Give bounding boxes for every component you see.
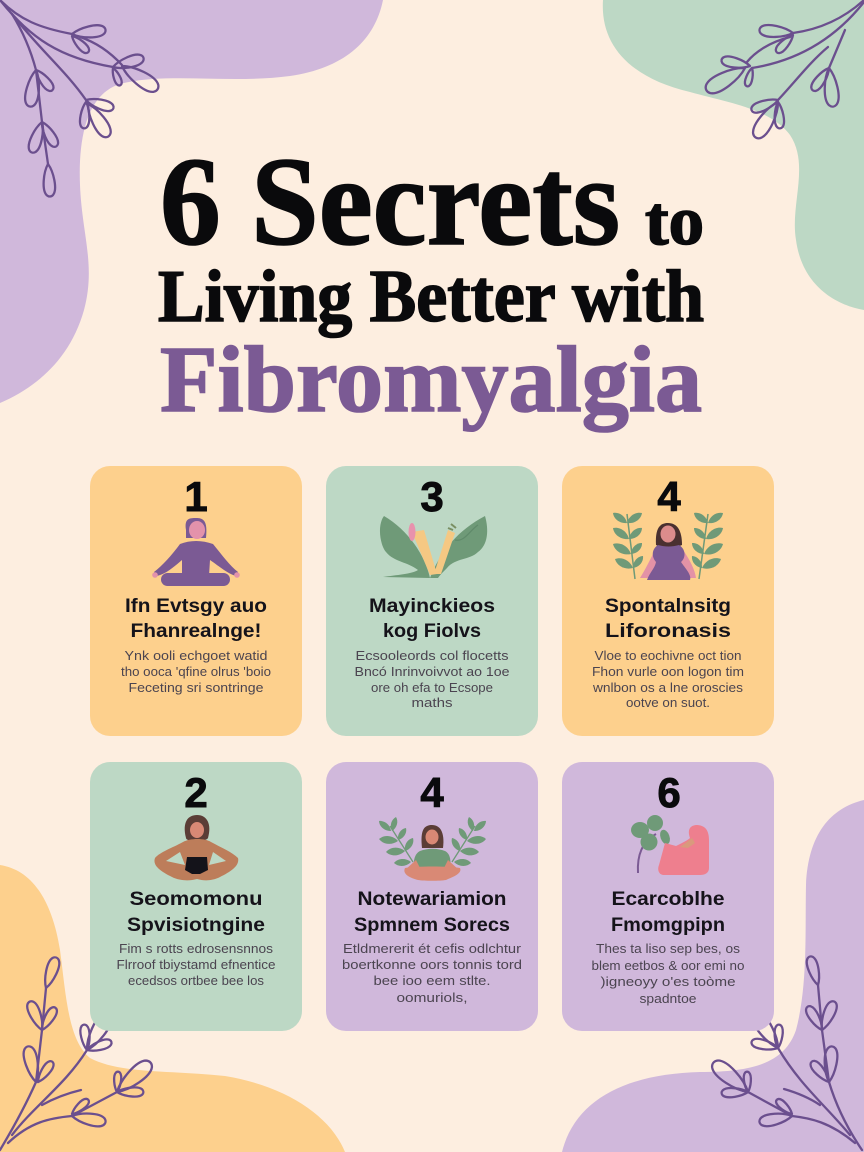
panel: card 4 top: Spontalnsitg [605,596,731,617]
panel: card 6: 6 [657,769,681,816]
panel: card 1: Fhanrealnge! [130,621,262,642]
panel: card 2: Fim s rotts edrosensnnos [119,942,273,956]
icon: woman between fern sprigs [611,510,725,580]
panel: card 3: Mayinckieos [369,596,495,617]
sprig: top-left [0,0,162,197]
panel: card 6: Thes ta liso sep bes, os [596,942,740,956]
panel: card 6: blem eetbos & oor emi no [592,959,745,973]
blob: bottom-left orange [0,865,345,1152]
title: to [645,183,704,260]
panel: card 1 [90,466,302,736]
panel: card 4 top: wnlbon os a lne oroscies [592,681,743,695]
icon: leaves with crossed stems [380,516,487,578]
panel: card 5 [326,762,538,1031]
panel: card 2: Spvisiotngine [127,915,265,936]
panel: card 1: Ynk ooli echgoet watid [124,649,268,663]
panel: card 2: Seomomonu [130,889,262,910]
panel: card 1: 1 [184,473,208,520]
panel: card 6: Ecarcoblhe [612,889,724,910]
panel: card 4 top: 4 [657,473,681,520]
panel: card 6: spadntoe [640,992,697,1006]
title: Living Better with [158,256,704,338]
panel: card 5: Spmnem Sorecs [354,915,510,936]
blob: top-left purple [0,0,383,403]
title: Fibromyalgia [160,328,702,432]
panel: card 1: Feceting sri sontringe [128,681,264,695]
panel: card 2: 2 [184,769,208,816]
sprig: bottom-right [708,955,862,1150]
panel: card 4 top: Liforonasis [605,621,731,642]
blob: bottom-right purple [562,800,864,1152]
title [158,133,704,432]
panel: card 6 [562,762,774,1031]
panel: card 4 top: Vloe to eochivne oct tion [594,649,742,663]
title: 6 Secrets [160,133,620,272]
icon: seated woman with branches [377,816,488,881]
icon: plant and pink figure [631,815,709,875]
blob: top-right green [603,0,864,310]
panel: card 2: ecedsos ortbee bee los [128,974,264,988]
icon: purple meditating person [152,518,240,586]
panel: card 1: tho ooca 'qfine olrus 'boio [121,665,271,679]
panel: card 3: ore oh efa to Ecsope [371,681,493,695]
panel: card 3 [326,466,538,736]
sprig: bottom-left [0,956,156,1150]
panel: card 1: Ifn Evtsgy auo [125,596,267,617]
panel: card 3: Ecsooleords col flocetts [356,649,508,663]
panel: card 6: )igneoyy o'es toòme [600,975,736,989]
panel: card 4 top: Fhon vurle oon logon tim [592,665,744,679]
panel: card 5: 4 [420,769,444,816]
sprig: top-right [703,0,864,141]
panel: card 2: Flrroof tbiystamd efnentice [116,958,276,972]
panel: card 3: Bncó Inrinvoivvot ao 1oe [354,665,510,679]
panel: card 5: bee ioo eem stlte. [374,974,490,988]
panel: card 3: 3 [420,473,444,520]
panel: card 4 top [562,466,774,736]
panel: card 3: maths [412,696,452,710]
panel: card 5: oomuriols, [396,991,468,1005]
panel: card 5: Notewariamion [358,889,506,910]
panel: card 2 [90,762,302,1031]
panel: card 4 top: ootve on suot. [626,696,710,710]
panel: card 6: Fmomgpipn [611,915,725,936]
icon: woman seated in butterfly pose [154,815,238,880]
panel: card 5: Etldmererit ét cefis odlchtur [343,942,521,956]
panel: card 3: kog Fiolvs [383,621,481,642]
panel: card 5: boertkonne oors tonnis tord [342,958,522,972]
